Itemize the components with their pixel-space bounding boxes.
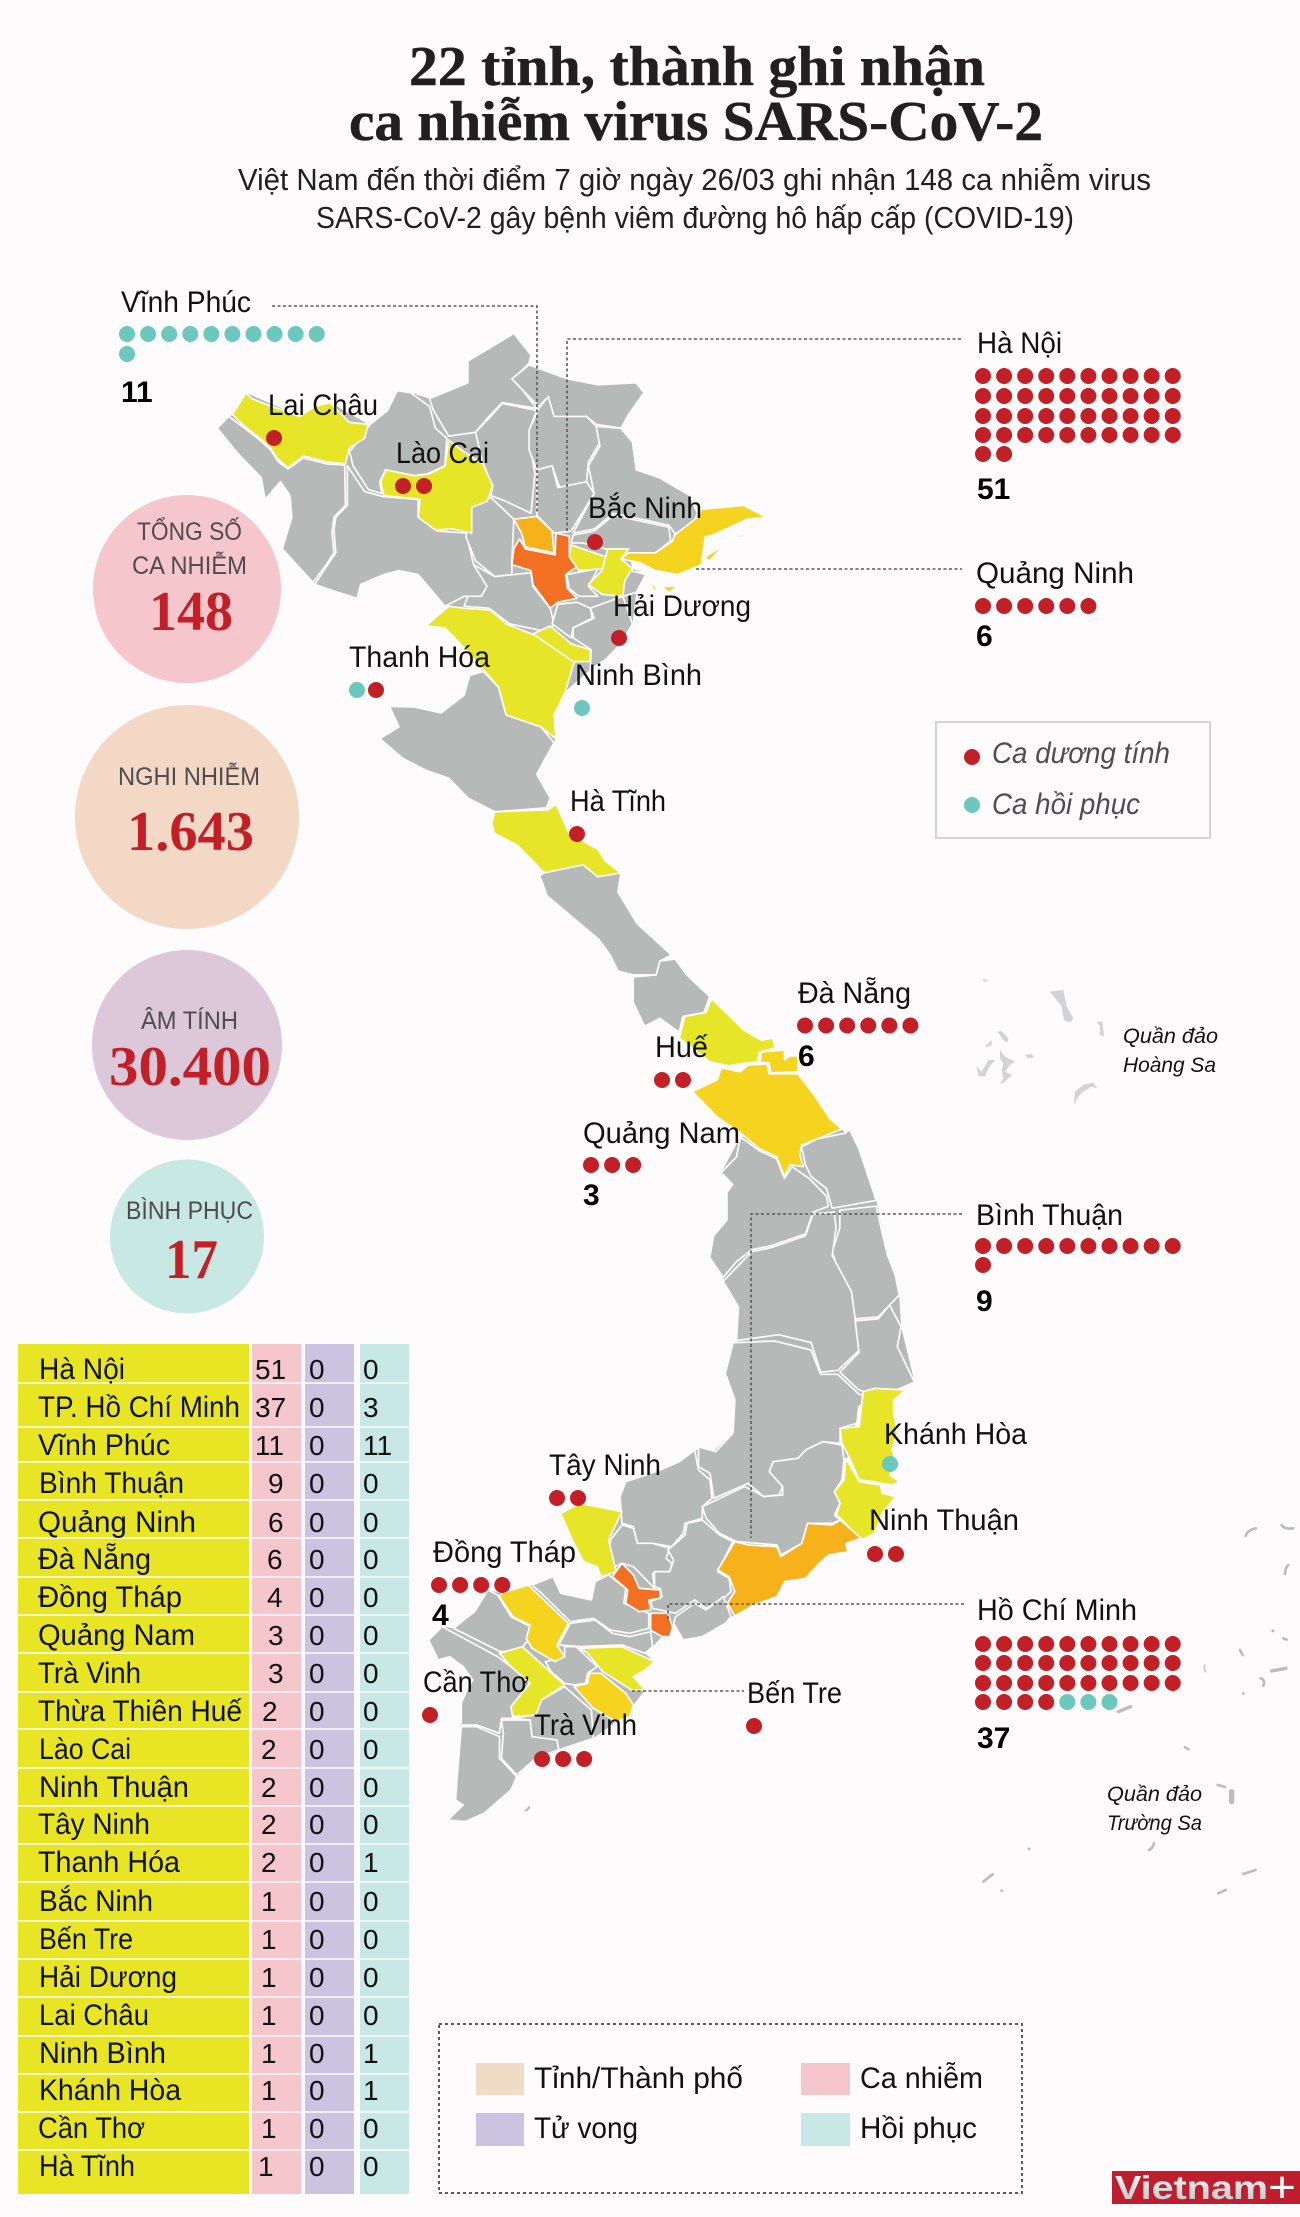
callout: Hà Nội: Hà Nội bbox=[977, 327, 1062, 360]
province: Huế bbox=[679, 999, 775, 1066]
row: Bình Thuận: 0 bbox=[363, 1468, 379, 1499]
row: Hà Tĩnh: 1 bbox=[258, 2151, 274, 2182]
row: Đồng Tháp bbox=[38, 1581, 379, 1614]
callout: Đồng Tháp: 4 bbox=[432, 1599, 449, 1632]
row: Hải Dương bbox=[39, 1961, 379, 1994]
stat circle: bình phục: 17 bbox=[165, 1229, 218, 1291]
row: Thừa Thiên Huế: 2 bbox=[262, 1696, 278, 1727]
callout: Hồ Chí Minh: Hồ Chí Minh bbox=[977, 1594, 1137, 1627]
logo: Vietnam+: + bbox=[1268, 2163, 1296, 2212]
row: Cần Thơ: 0 bbox=[309, 2113, 325, 2144]
row: Thừa Thiên Huế: Thừa Thiên Huế bbox=[38, 1695, 242, 1728]
stat circle: nghi nhiễm: NGHI NHIỄM bbox=[118, 761, 260, 791]
callout: Quảng Ninh bbox=[976, 557, 1134, 653]
label: Bắc Ninh: Bắc Ninh bbox=[588, 492, 702, 525]
row: Vĩnh Phúc: Vĩnh Phúc bbox=[38, 1429, 170, 1462]
callout: Đà Nẵng: 6 bbox=[798, 1040, 815, 1073]
column: hồi phục bbox=[360, 1344, 409, 2194]
callout: Vĩnh Phúc: Vĩnh Phúc bbox=[121, 286, 251, 319]
row: Quảng Ninh: 6 bbox=[268, 1507, 284, 1538]
islands of Quảng Ninh bbox=[650, 527, 759, 592]
callout: Quảng Ninh: Quảng Ninh bbox=[976, 557, 1134, 590]
row: Trà Vinh: 0 bbox=[363, 1658, 379, 1689]
label: Khánh Hòa: Khánh Hòa bbox=[884, 1418, 1027, 1451]
label: Lai Châu: Lai Châu bbox=[268, 389, 378, 422]
row: Lai Châu bbox=[39, 1999, 379, 2032]
callout: Hồ Chí Minh: 37 bbox=[977, 1722, 1010, 1755]
row: Bến Tre: 0 bbox=[363, 1924, 379, 1955]
callout: Bình Thuận bbox=[975, 1199, 1173, 1318]
column: ca nhiễm bbox=[252, 1344, 301, 2194]
province: Hà Nội bbox=[512, 533, 577, 608]
row: Thanh Hóa bbox=[38, 1846, 379, 1879]
row: Quảng Ninh: Quảng Ninh bbox=[38, 1506, 196, 1539]
label: Quần đảo Trường Sa bbox=[1107, 1783, 1202, 1835]
row: Trà Vinh: Trà Vinh bbox=[38, 1657, 141, 1690]
row: Bình Thuận: 9 bbox=[268, 1468, 284, 1499]
legend: table columns bbox=[439, 2024, 1022, 2193]
row: Ninh Bình: 1 bbox=[261, 2038, 277, 2069]
province: Hà Tĩnh bbox=[492, 804, 621, 877]
row: Ninh Thuận: 0 bbox=[363, 1772, 379, 1803]
callout: Vĩnh Phúc bbox=[121, 286, 318, 409]
row: Vĩnh Phúc: 0 bbox=[309, 1430, 325, 1461]
stat circle: bình phục: BÌNH PHỤC bbox=[126, 1196, 253, 1225]
row: Bến Tre: Bến Tre bbox=[39, 1923, 133, 1956]
row: Bắc Ninh bbox=[39, 1885, 379, 1918]
islands: Trường Sa bbox=[983, 1525, 1293, 1893]
callout: Vĩnh Phúc: 11 bbox=[121, 376, 153, 409]
row: Tây Ninh: Tây Ninh bbox=[38, 1808, 150, 1841]
stat circle: tổng số ca nhiễm bbox=[93, 495, 281, 683]
province: Lào Cai bbox=[381, 440, 493, 533]
legend: dot types bbox=[936, 722, 1210, 838]
stat circle: bình phục bbox=[110, 1160, 264, 1314]
row: Khánh Hòa: 1 bbox=[261, 2075, 277, 2106]
row: Lào Cai: 0 bbox=[363, 1734, 379, 1765]
row: Bắc Ninh: Bắc Ninh bbox=[39, 1885, 153, 1918]
row: Cần Thơ bbox=[38, 2112, 379, 2145]
column: tử vong bbox=[305, 1344, 354, 2194]
row: Ninh Bình: 0 bbox=[309, 2038, 325, 2069]
legend: table columns: Tử vong bbox=[534, 2112, 638, 2145]
row: Quảng Nam: 0 bbox=[309, 1620, 325, 1651]
province: Hải Dương bbox=[588, 549, 632, 596]
row: Lai Châu: 0 bbox=[309, 2000, 325, 2031]
stat circle: nghi nhiễm: 1.643 bbox=[127, 801, 254, 863]
callout: Hà Nội bbox=[977, 327, 1173, 506]
row: TP. Hồ Chí Minh: 3 bbox=[363, 1392, 379, 1423]
label: Trà Vinh: Trà Vinh bbox=[534, 1709, 637, 1742]
logo: Vietnam+ bbox=[1112, 2163, 1300, 2212]
label: Ninh Thuận bbox=[867, 1504, 1019, 1562]
row: Đồng Tháp: Đồng Tháp bbox=[38, 1581, 182, 1614]
callout: Đà Nẵng: Đà Nẵng bbox=[798, 977, 911, 1010]
row: Khánh Hòa: 1 bbox=[363, 2075, 379, 2106]
label: Tây Ninh: Tây Ninh bbox=[549, 1449, 661, 1482]
row: Quảng Ninh: 0 bbox=[309, 1507, 325, 1538]
stat circle: âm tính: 30.400 bbox=[109, 1036, 271, 1098]
row: Cần Thơ: Cần Thơ bbox=[38, 2112, 145, 2145]
stat circle: tổng số ca nhiễm: CA NHIỄM bbox=[132, 550, 247, 580]
province: Quảng Ninh bbox=[621, 505, 766, 575]
label: Quần đảo Hoàng Sa bbox=[1123, 1025, 1218, 1077]
row: Hà Tĩnh: 0 bbox=[363, 2151, 379, 2182]
row: Vĩnh Phúc bbox=[38, 1429, 392, 1462]
row: Quảng Nam: 3 bbox=[268, 1620, 284, 1651]
province: Tây Ninh bbox=[561, 1503, 622, 1577]
row: Cần Thơ: 0 bbox=[363, 2113, 379, 2144]
label: Hải Dương: Hải Dương bbox=[613, 590, 751, 623]
row: Đồng Tháp: 4 bbox=[267, 1582, 283, 1613]
callout: Quảng Nam: Quảng Nam bbox=[583, 1117, 740, 1150]
callout: Đồng Tháp: Đồng Tháp bbox=[433, 1536, 576, 1569]
province: Ninh Bình bbox=[533, 626, 590, 662]
row: Đà Nẵng: 6 bbox=[267, 1544, 283, 1575]
row: Bình Thuận bbox=[39, 1467, 379, 1500]
subtitle: SARS-CoV-2 gây bệnh viêm đường hô hấp cấp (COVID-19) bbox=[316, 200, 1074, 235]
province: Quảng Nam bbox=[693, 1064, 842, 1177]
row: Hà Nội bbox=[39, 1353, 379, 1386]
row: Hà Nội: Hà Nội bbox=[39, 1353, 125, 1386]
label: Quần đảo Trường Sa: Trường Sa bbox=[1107, 1812, 1202, 1835]
row: Quảng Nam: 0 bbox=[363, 1620, 379, 1651]
province: Trà Vinh bbox=[574, 1673, 633, 1722]
row: Thừa Thiên Huế: 0 bbox=[363, 1696, 379, 1727]
row: Đồng Tháp: 0 bbox=[309, 1582, 325, 1613]
row: Vĩnh Phúc: 11 bbox=[255, 1430, 284, 1461]
label: Cần Thơ: Cần Thơ bbox=[423, 1666, 529, 1699]
column: tỉnh/thành phố bbox=[18, 1344, 249, 2194]
row: Cần Thơ: 1 bbox=[261, 2113, 277, 2144]
label: Quần đảo Hoàng Sa: Quần đảo bbox=[1123, 1025, 1218, 1048]
row: Hà Tĩnh: Hà Tĩnh bbox=[39, 2150, 135, 2183]
islands: Hoàng Sa bbox=[977, 979, 1104, 1105]
row: Ninh Bình bbox=[39, 2037, 379, 2070]
callout: Bình Thuận: 9 bbox=[976, 1285, 993, 1318]
label: Ninh Bình: Ninh Bình bbox=[575, 659, 702, 692]
label: Hải Dương bbox=[611, 590, 751, 646]
row: Trà Vinh: 0 bbox=[309, 1658, 325, 1689]
label: Quần đảo Trường Sa: Quần đảo bbox=[1107, 1783, 1202, 1806]
callout: Hồ Chí Minh bbox=[977, 1594, 1173, 1755]
province: Cần Thơ bbox=[500, 1647, 565, 1717]
row: Lào Cai: 0 bbox=[309, 1734, 325, 1765]
row: Tây Ninh: 2 bbox=[261, 1809, 277, 1840]
row: Hà Nội: 0 bbox=[363, 1354, 379, 1385]
row: Bắc Ninh: 0 bbox=[363, 1886, 379, 1917]
row: TP. Hồ Chí Minh: 37 bbox=[255, 1392, 286, 1423]
row: Lào Cai bbox=[39, 1733, 379, 1766]
row: Khánh Hòa: 0 bbox=[309, 2075, 325, 2106]
label: Khánh Hòa bbox=[882, 1418, 1027, 1472]
map of Vietnam bbox=[217, 333, 914, 1822]
label: Bến Tre: Bến Tre bbox=[747, 1677, 842, 1710]
title: 22 tỉnh, thành ghi nhận bbox=[409, 36, 985, 98]
province: Lai Châu bbox=[233, 393, 368, 468]
label: Lào Cai: Lào Cai bbox=[396, 437, 489, 470]
row: Ninh Thuận bbox=[39, 1771, 379, 1804]
row: TP. Hồ Chí Minh: 0 bbox=[309, 1392, 325, 1423]
label: Ninh Thuận: Ninh Thuận bbox=[869, 1504, 1019, 1537]
callout: Đồng Tháp bbox=[432, 1536, 576, 1632]
row: Quảng Nam bbox=[38, 1619, 379, 1652]
province: Bắc Ninh bbox=[569, 545, 606, 571]
row: Khánh Hòa: Khánh Hòa bbox=[39, 2074, 181, 2107]
legend: table columns: Tỉnh/Thành phố bbox=[534, 2062, 743, 2095]
callout: Quảng Nam: 3 bbox=[583, 1179, 600, 1212]
row: Lai Châu: Lai Châu bbox=[39, 1999, 149, 2032]
map: central provinces bbox=[539, 865, 914, 1473]
row: TP. Hồ Chí Minh bbox=[38, 1391, 379, 1424]
row: Tây Ninh bbox=[38, 1808, 379, 1841]
label: Lào Cai bbox=[395, 437, 489, 494]
label: Bắc Ninh bbox=[587, 492, 702, 550]
subtitle bbox=[238, 162, 1151, 235]
row: Quảng Ninh bbox=[38, 1506, 379, 1539]
row: Ninh Thuận: 2 bbox=[261, 1772, 277, 1803]
row: Đồng Tháp: 0 bbox=[363, 1582, 379, 1613]
row: Hải Dương: 0 bbox=[363, 1962, 379, 1993]
row: Bắc Ninh: 0 bbox=[309, 1886, 325, 1917]
row: Vĩnh Phúc: 11 bbox=[363, 1430, 392, 1461]
title bbox=[349, 36, 1043, 153]
label: Hà Tĩnh: Hà Tĩnh bbox=[570, 785, 666, 818]
legend: dot types: Ca dương tính bbox=[992, 737, 1170, 770]
row: Ninh Bình: Ninh Bình bbox=[39, 2037, 166, 2070]
row: Ninh Bình: 1 bbox=[363, 2038, 379, 2069]
province: Bến Tre bbox=[580, 1647, 654, 1690]
label: Bến Tre bbox=[746, 1677, 842, 1734]
row: Thanh Hóa: 0 bbox=[309, 1847, 325, 1878]
province: Đà Nẵng bbox=[760, 1050, 798, 1073]
row: Thừa Thiên Huế bbox=[38, 1695, 379, 1728]
row: Ninh Thuận: 0 bbox=[309, 1772, 325, 1803]
label: Lai Châu bbox=[266, 389, 378, 446]
province: Thanh Hóa bbox=[426, 606, 575, 739]
row: TP. Hồ Chí Minh: TP. Hồ Chí Minh bbox=[38, 1391, 240, 1424]
row: Thanh Hóa: Thanh Hóa bbox=[38, 1846, 180, 1879]
row: Trà Vinh bbox=[38, 1657, 379, 1690]
stat circle: âm tính bbox=[92, 950, 282, 1140]
row: Hải Dương: Hải Dương bbox=[39, 1961, 177, 1994]
label: Thanh Hóa bbox=[349, 641, 490, 698]
row: Lai Châu: 0 bbox=[363, 2000, 379, 2031]
province: Hồ Chí Minh bbox=[612, 1563, 660, 1612]
label: Huế bbox=[654, 1031, 708, 1088]
map: northern provinces bbox=[217, 333, 766, 877]
logo: Vietnam+: Vietnam bbox=[1115, 2169, 1268, 2206]
row: Bến Tre: 1 bbox=[261, 1924, 277, 1955]
row: Tây Ninh: 0 bbox=[309, 1809, 325, 1840]
label: Quần đảo Hoàng Sa: Hoàng Sa bbox=[1123, 1054, 1216, 1077]
legend: table columns: Hồi phục bbox=[860, 2112, 977, 2145]
row: Hải Dương: 1 bbox=[261, 1962, 277, 1993]
row: Hải Dương: 0 bbox=[309, 1962, 325, 1993]
callout: Bình Thuận: Bình Thuận bbox=[976, 1199, 1123, 1232]
table of provinces bbox=[18, 1344, 409, 2194]
province: Khánh Hòa bbox=[840, 1388, 905, 1485]
stat circle: nghi nhiễm bbox=[75, 705, 299, 929]
row: Thanh Hóa: 2 bbox=[261, 1847, 277, 1878]
row: Hà Nội: 0 bbox=[309, 1354, 325, 1385]
row: Hà Tĩnh: 0 bbox=[309, 2151, 325, 2182]
province: Ninh Thuận bbox=[834, 1458, 896, 1540]
row: Thanh Hóa: 1 bbox=[363, 1847, 379, 1878]
callout: Quảng Nam bbox=[583, 1117, 740, 1212]
callout: Hà Nội: 51 bbox=[977, 473, 1010, 506]
row: Tây Ninh: 0 bbox=[363, 1809, 379, 1840]
province: Bình Thuận bbox=[718, 1520, 861, 1616]
legend: table columns: Ca nhiễm bbox=[860, 2062, 983, 2095]
label: Trà Vinh bbox=[534, 1709, 637, 1759]
province: Vĩnh Phúc bbox=[514, 516, 554, 553]
row: Thừa Thiên Huế: 0 bbox=[309, 1696, 325, 1727]
row: Đà Nẵng bbox=[38, 1543, 379, 1576]
row: Hà Nội: 51 bbox=[255, 1354, 286, 1385]
label: Cần Thơ bbox=[422, 1666, 529, 1723]
stat circle: tổng số ca nhiễm: 148 bbox=[149, 581, 233, 643]
row: Ninh Thuận: Ninh Thuận bbox=[39, 1771, 189, 1804]
label: Hà Tĩnh bbox=[569, 785, 666, 842]
row: Đà Nẵng: Đà Nẵng bbox=[38, 1543, 151, 1576]
stat circle: âm tính: ÂM TÍNH bbox=[141, 1006, 238, 1035]
row: Lào Cai: 2 bbox=[261, 1734, 277, 1765]
province: Đồng Tháp bbox=[500, 1585, 568, 1662]
title: ca nhiễm virus SARS-CoV-2 bbox=[349, 91, 1043, 153]
row: Lai Châu: 1 bbox=[261, 2000, 277, 2031]
legend: dot types: Ca hồi phục bbox=[992, 788, 1140, 821]
label: Tây Ninh bbox=[549, 1449, 661, 1506]
row: Đà Nẵng: 0 bbox=[309, 1544, 325, 1575]
row: Khánh Hòa bbox=[39, 2074, 379, 2107]
row: Bắc Ninh: 1 bbox=[261, 1886, 277, 1917]
row: Quảng Nam: Quảng Nam bbox=[38, 1619, 195, 1652]
callout: Đà Nẵng bbox=[798, 977, 912, 1073]
subtitle: Việt Nam đến thời điểm 7 giờ ngày 26/03 ghi nhận 148 ca nhiễm virus bbox=[238, 162, 1151, 197]
row: Trà Vinh: 3 bbox=[268, 1658, 284, 1689]
map: southern provinces bbox=[429, 1341, 905, 1822]
row: Hà Tĩnh bbox=[39, 2150, 379, 2183]
row: Quảng Ninh: 0 bbox=[363, 1507, 379, 1538]
row: Bình Thuận: Bình Thuận bbox=[39, 1467, 184, 1500]
row: Bình Thuận: 0 bbox=[309, 1468, 325, 1499]
label: Thanh Hóa: Thanh Hóa bbox=[349, 641, 490, 674]
row: Bến Tre: 0 bbox=[309, 1924, 325, 1955]
row: Lào Cai: Lào Cai bbox=[39, 1733, 131, 1766]
row: Đà Nẵng: 0 bbox=[363, 1544, 379, 1575]
label: Huế: Huế bbox=[655, 1031, 708, 1064]
leader lines bbox=[272, 306, 964, 1691]
stat circle: tổng số ca nhiễm: TỔNG SỐ bbox=[137, 516, 242, 546]
callout: Quảng Ninh: 6 bbox=[976, 620, 993, 653]
label: Ninh Bình bbox=[574, 659, 702, 716]
row: Bến Tre bbox=[39, 1923, 379, 1956]
